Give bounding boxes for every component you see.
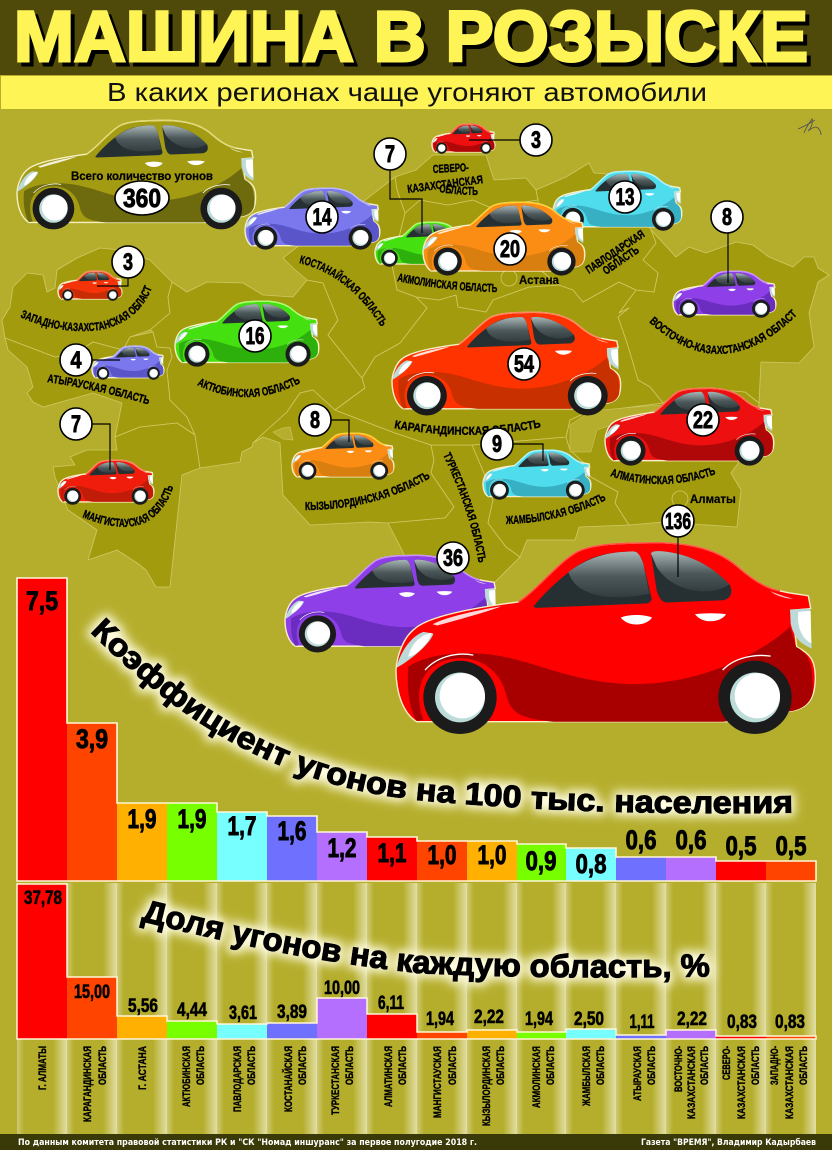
map labels — [20, 163, 796, 562]
car: Kyzylorda 8 — [292, 404, 394, 480]
column labels: АКМОЛИНСКАЯ — [531, 1046, 543, 1108]
car: Aktobe 16 — [175, 301, 319, 367]
bar chart: share of thefts: 10,00 — [324, 978, 360, 999]
column labels: ОБЛАСТЬ — [195, 1046, 207, 1085]
label: North Kazakhstan: КАЗАХСТАНСКАЯ — [407, 175, 483, 194]
car: Astana 20 — [423, 202, 585, 276]
column labels: ЖАМБЫЛСКАЯ — [581, 1046, 593, 1107]
car: Pavlodar 13 — [553, 171, 682, 231]
bar chart: rate per 100 thousand: 1,7 — [228, 811, 256, 841]
column labels: ОБЛАСТЬ — [545, 1046, 557, 1085]
car: Kostanay 14 — [245, 188, 380, 250]
bar chart: share of thefts: 2,50 — [574, 1009, 604, 1030]
column labels: ОБЛАСТЬ — [495, 1046, 507, 1085]
car: Zhambyl 9 — [481, 428, 591, 500]
region: West Kazakhstan — [2, 248, 172, 357]
column labels: ТУРКЕСТАНСКАЯ — [330, 1046, 342, 1115]
bar chart: rate per 100 thousand: 0,8 — [576, 849, 606, 879]
car: Almaty city 136 — [396, 505, 815, 734]
label: Kyzylorda: КЫЗЫЛОРДИНСКАЯ ОБЛАСТЬ — [305, 472, 430, 510]
bar chart: rate per 100 thousand: 0,6 — [676, 825, 706, 855]
subtitle: В каких регионах чаще угоняют автомобили — [107, 77, 707, 107]
column labels: КОСТАНАЙСКАЯ — [282, 1046, 295, 1112]
label: Almaty region: АЛМАТИНСКАЯ ОБЛАСТЬ — [610, 468, 716, 484]
region: Zhambyl — [472, 437, 629, 557]
bar chart: rate per 100 thousand: 1,9 — [178, 804, 206, 834]
bar chart: share of thefts: 1,94 — [426, 1009, 454, 1030]
car: Pavlodar 13: 13 — [616, 184, 634, 211]
car: total 360: 360 — [123, 183, 161, 213]
bar chart: rate per 100 thousand: 1,1 — [378, 838, 406, 868]
region: Akmola — [392, 200, 559, 312]
bar chart: rate per 100 thousand: 0,5 — [726, 831, 756, 861]
car: Mangistau 7: 7 — [71, 411, 81, 438]
column labels: ОБЛАСТЬ — [344, 1046, 356, 1085]
region: Kostanay — [283, 177, 427, 378]
label: Karaganda: КАРАГАНДИНСКАЯ ОБЛАСТЬ — [394, 420, 540, 437]
Almaty marker — [672, 491, 688, 507]
column labels: КАЗАХСТАНСКАЯ — [686, 1046, 698, 1119]
column labels: МАНГИСТАУСКАЯ — [432, 1046, 444, 1118]
car: East Kazakhstan 8: 8 — [722, 204, 732, 231]
car: Akmola 7: 7 — [385, 141, 395, 168]
title: МАШИНА В РОЗЫСКЕ — [14, 0, 808, 77]
car: Almaty region 22 — [605, 388, 774, 466]
region: Kyzylorda — [253, 390, 454, 525]
label: East Kazakhstan: ВОСТОЧНО-КАЗАХСТАНСКАЯ ОБЛАСТЬ — [649, 308, 796, 354]
car: Almaty region 22: 22 — [693, 407, 713, 434]
heading: share by region: Доля угонов на каждую область, % — [128, 890, 720, 994]
region: Karaganda — [335, 282, 663, 445]
bar chart: share of thefts — [17, 884, 816, 1039]
label: Mangistau: МАНГИСТАУСКАЯ ОБЛАСТЬ — [82, 486, 173, 528]
label: Aktobe: АКТЮБИНСКАЯ ОБЛАСТЬ — [197, 377, 300, 398]
bar chart: share of thefts: 37,78 — [24, 888, 62, 909]
car: East Kazakhstan 8 — [673, 201, 776, 318]
column labels: ОБЛАСТЬ — [646, 1046, 658, 1085]
bar chart: share of thefts: 5,56 — [128, 996, 158, 1017]
region: Mangistau — [53, 423, 200, 587]
column labels: ОБЛАСТЬ — [297, 1046, 309, 1085]
car: total 360: Всего количество угонов — [71, 171, 213, 183]
bar chart: share of thefts: 1,11 — [630, 1012, 655, 1033]
label: Pavlodar: ПАВЛОДАРСКАЯ — [584, 230, 646, 274]
footer band — [0, 1134, 832, 1150]
label: Pavlodar: ОБЛАСТЬ — [602, 248, 639, 274]
heading: rate per 100 thousand: Коэффициент угонов на 100 тыс. населения — [80, 607, 802, 825]
column labels: ОБЛАСТЬ — [246, 1046, 258, 1085]
car: Karaganda 54: 54 — [514, 351, 534, 378]
region: Pavlodar — [536, 163, 658, 302]
bar chart: share of thefts: 4,44 — [177, 1000, 207, 1021]
subtitle band — [1, 76, 832, 109]
region: Turkestan — [388, 445, 520, 600]
bar chart: share of thefts: 1,94 — [525, 1009, 553, 1030]
column labels — [37, 1046, 810, 1126]
column labels: ОБЛАСТЬ — [699, 1046, 711, 1085]
region: Aktobe — [150, 280, 365, 468]
car: Zhambyl 9: 9 — [492, 431, 502, 458]
car: Astana 20: 20 — [500, 236, 520, 263]
column labels: ОБЛАСТЬ — [447, 1046, 459, 1085]
car: Almaty city 136: 136 — [665, 508, 691, 534]
signature — [798, 119, 821, 135]
label: Akmola: АКМОЛИНСКАЯ ОБЛАСТЬ — [397, 274, 498, 292]
region: Almaty — [566, 388, 759, 527]
car: Kyzylorda 8: 8 — [310, 407, 320, 434]
column labels: ЗАПАДНО- — [769, 1046, 781, 1085]
bar chart: rate per 100 thousand: 3,9 — [76, 724, 108, 754]
car: Akmola 7 — [374, 138, 470, 267]
bar chart: rate per 100 thousand: 0,6 — [626, 825, 656, 855]
label: North Kazakhstan: СЕВЕРО- — [433, 163, 469, 174]
bar chart: rate per 100 thousand — [17, 578, 816, 881]
column labels: ВОСТОЧНО- — [673, 1046, 685, 1092]
bar chart: rate per 100 thousand: 0,5 — [776, 831, 806, 861]
bar chart: rate per 100 thousand: 1,0 — [428, 840, 456, 870]
column labels: ПАВЛОДАРСКАЯ — [232, 1046, 244, 1112]
bar chart: rate per 100 thousand: 1,6 — [278, 816, 306, 846]
label: Kostanay: КОСТАНАЙСКАЯ ОБЛАСТЬ — [299, 255, 386, 326]
column labels: ОБЛАСТЬ — [97, 1046, 109, 1085]
car: West Kazakhstan 3 — [58, 246, 144, 301]
bar chart: share of thefts: 2,22 — [474, 1007, 504, 1028]
car: Turkestan 36 — [285, 542, 498, 652]
bar chart: rate per 100 thousand: 1,9 — [128, 804, 156, 834]
car: Atyrau 4 — [60, 344, 164, 380]
Astana marker — [501, 270, 517, 286]
column backgrounds for share chart — [17, 883, 816, 1134]
region: North Kazakhstan — [395, 155, 538, 213]
label: Almaty city: Алматы — [690, 494, 736, 506]
car: Turkestan 36: 36 — [443, 545, 463, 572]
footer: source: По данным комитета правовой статистики РК и "СК "Номад иншуранс" за первое полугодие 2018 г. — [18, 1138, 477, 1148]
label: Turkestan: ТУРКЕСТАНСКАЯ ОБЛАСТЬ — [444, 451, 486, 562]
bar chart: share of thefts: 2,22 — [677, 1009, 707, 1030]
lake: Balkhash — [570, 405, 662, 452]
bar chart: rate per 100 thousand: 1,2 — [328, 833, 356, 863]
column labels: Г. АСТАНА — [137, 1046, 149, 1090]
bar chart: share of thefts: 3,89 — [277, 1002, 307, 1023]
car: North Kazakhstan 3: 3 — [531, 127, 541, 154]
region: Atyrau — [5, 332, 195, 437]
bar chart: rate per 100 thousand: 0,9 — [526, 846, 556, 876]
column labels: АТЫРАУСКАЯ — [632, 1046, 644, 1101]
car: Atyrau 4: 4 — [70, 347, 82, 374]
column labels: Г. АЛМАТЫ — [37, 1046, 49, 1090]
label: Zhambyl: ЖАМБЫЛСКАЯ ОБЛАСТЬ — [506, 494, 606, 524]
label: Atyrau: АТЫРАУСКАЯ ОБЛАСТЬ — [47, 374, 150, 404]
bar chart: share of thefts: 15,00 — [74, 982, 110, 1003]
bar chart: rate per 100 thousand: 1,0 — [478, 840, 506, 870]
car: Karaganda 54 — [392, 312, 621, 415]
label: Astana: Астана — [519, 275, 560, 287]
column labels: КАЗАХСТАНСКАЯ — [736, 1046, 748, 1119]
column labels: КЫЗЫЛОРДИНСКАЯ — [481, 1046, 493, 1126]
car: Mangistau 7 — [58, 408, 154, 505]
column labels: СЕВЕРО- — [721, 1046, 733, 1080]
car: Aktobe 16: 16 — [246, 323, 264, 350]
column labels: ОБЛАСТЬ — [397, 1046, 409, 1085]
lake: Aral — [273, 427, 293, 440]
car: West Kazakhstan 3: 3 — [123, 249, 133, 276]
column labels: АКТЮБИНСКАЯ — [181, 1046, 193, 1107]
car: Kostanay 14: 14 — [312, 204, 332, 231]
bar chart: share of thefts: 3,61 — [229, 1003, 257, 1024]
column labels: КАЗАХСТАНСКАЯ — [784, 1046, 796, 1119]
region: East Kazakhstan — [618, 230, 829, 403]
footer: credit: Газета "ВРЕМЯ", Владимир Кадырбаев — [641, 1137, 816, 1148]
bar chart: rate per 100 thousand: 7,5 — [26, 586, 58, 616]
title band — [0, 0, 832, 75]
bar chart: share of thefts: 6,11 — [378, 993, 404, 1014]
column labels: ОБЛАСТЬ — [798, 1046, 810, 1085]
label: North Kazakhstan: ОБЛАСТЬ — [440, 184, 478, 196]
column labels: АЛМАТИНСКАЯ — [383, 1046, 395, 1107]
column labels: ОБЛАСТЬ — [750, 1046, 762, 1085]
map of Kazakhstan — [2, 155, 829, 600]
column labels: КАРАГАНДИНСКАЯ — [82, 1046, 94, 1122]
column labels: ОБЛАСТЬ — [595, 1046, 607, 1085]
car: North Kazakhstan 3 — [432, 124, 552, 156]
bar chart: share of thefts: 0,83 — [775, 1012, 805, 1033]
label: North Kazakhstan — [407, 163, 483, 196]
car: total 360 — [17, 120, 256, 229]
bar chart: share of thefts: 0,83 — [727, 1012, 757, 1033]
